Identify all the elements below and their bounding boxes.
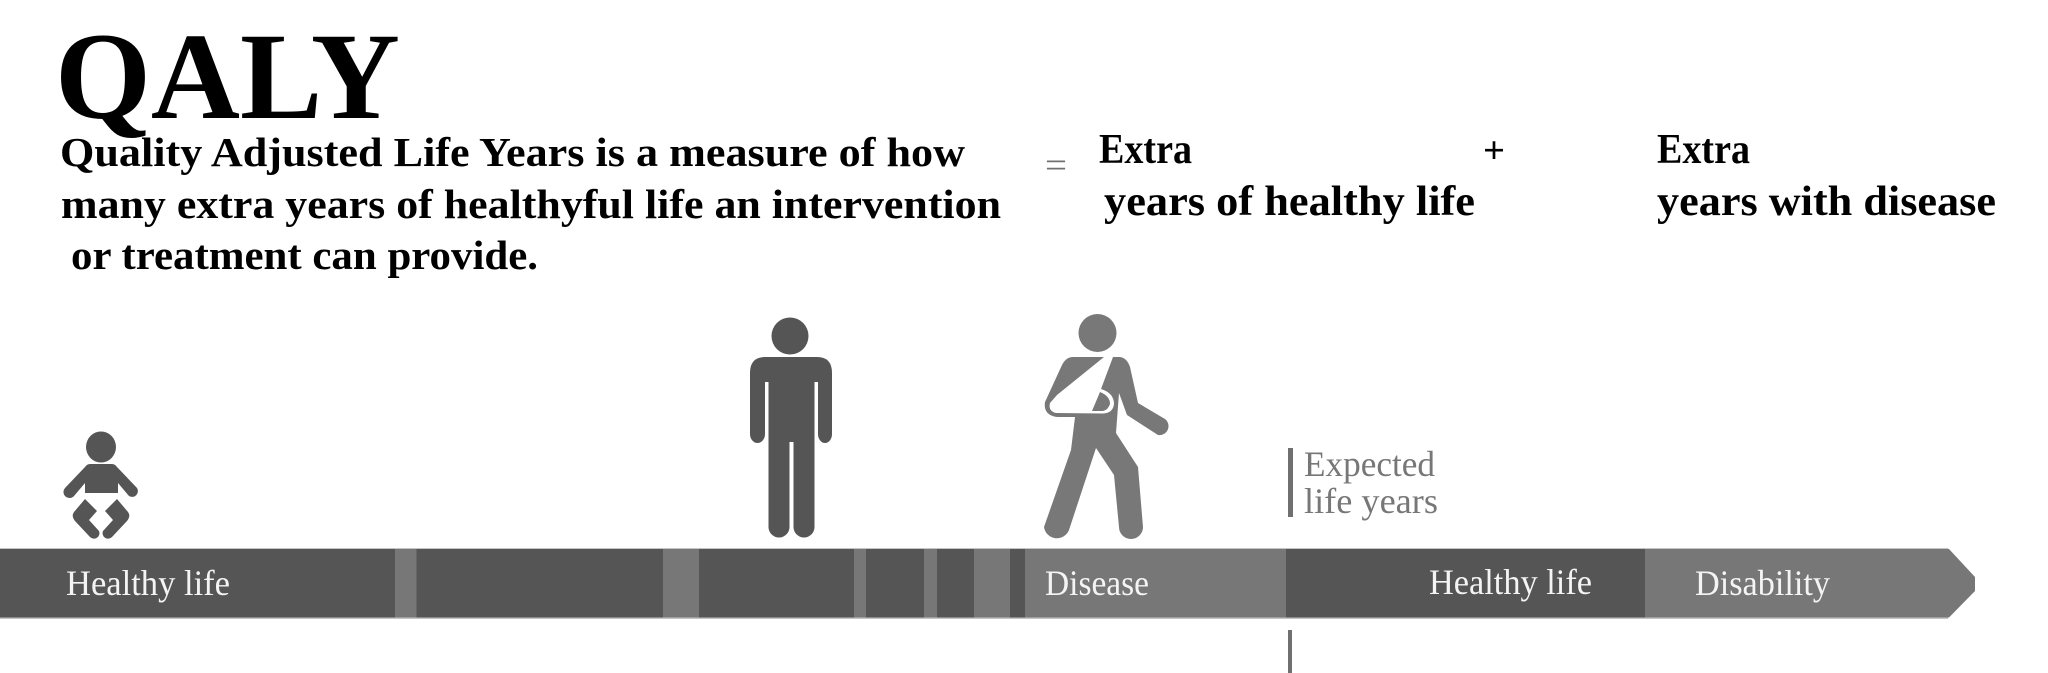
formula term: extra years of healthy life	[1099, 127, 1475, 225]
icon: baby	[63, 432, 138, 539]
bar segment: healthy life after expected life years	[1286, 549, 1645, 618]
formula term: extra years of healthy life: Extra	[1099, 127, 1192, 173]
bar segment: healthy life dark base	[0, 549, 1286, 618]
marker: expected life years lower line	[1288, 630, 1292, 673]
label: expected life years: Expected	[1304, 444, 1435, 484]
formula term: extra years with disease	[1657, 127, 1996, 225]
plus sign: +	[1483, 130, 1505, 172]
label: healthy life extra: Healthy life	[1429, 562, 1592, 602]
definition text: many extra years of healthyful life an intervention	[61, 181, 1001, 227]
icon: person with arm in sling	[1044, 314, 1169, 539]
formula term: extra years with disease: years with disease	[1657, 179, 1996, 225]
title: QALY	[55, 8, 400, 145]
label: expected life years: life years	[1304, 481, 1438, 521]
definition text	[60, 129, 1001, 278]
bar outline	[0, 548, 1948, 619]
formula term: extra years with disease: Extra	[1657, 127, 1750, 173]
label: healthy life: Healthy life	[66, 563, 230, 603]
formula term: extra years of healthy life: years of healthy life	[1104, 179, 1475, 225]
bar segment: disease	[1025, 549, 1286, 618]
definition text: Quality Adjusted Life Years is a measure of how	[60, 129, 965, 175]
marker: expected life years upper line	[1288, 448, 1293, 517]
timeline arrow bar	[0, 548, 1975, 619]
label: disease: Disease	[1045, 563, 1149, 603]
bar segment: disability arrowhead	[1645, 549, 1975, 618]
icon: healthy adult	[750, 318, 832, 538]
label: expected life years	[1304, 444, 1438, 521]
label: disability: Disability	[1695, 563, 1830, 603]
definition text: or treatment can provide.	[71, 232, 538, 278]
equals sign: =	[1045, 145, 1067, 185]
bar stripes: disease episodes	[395, 549, 1010, 618]
